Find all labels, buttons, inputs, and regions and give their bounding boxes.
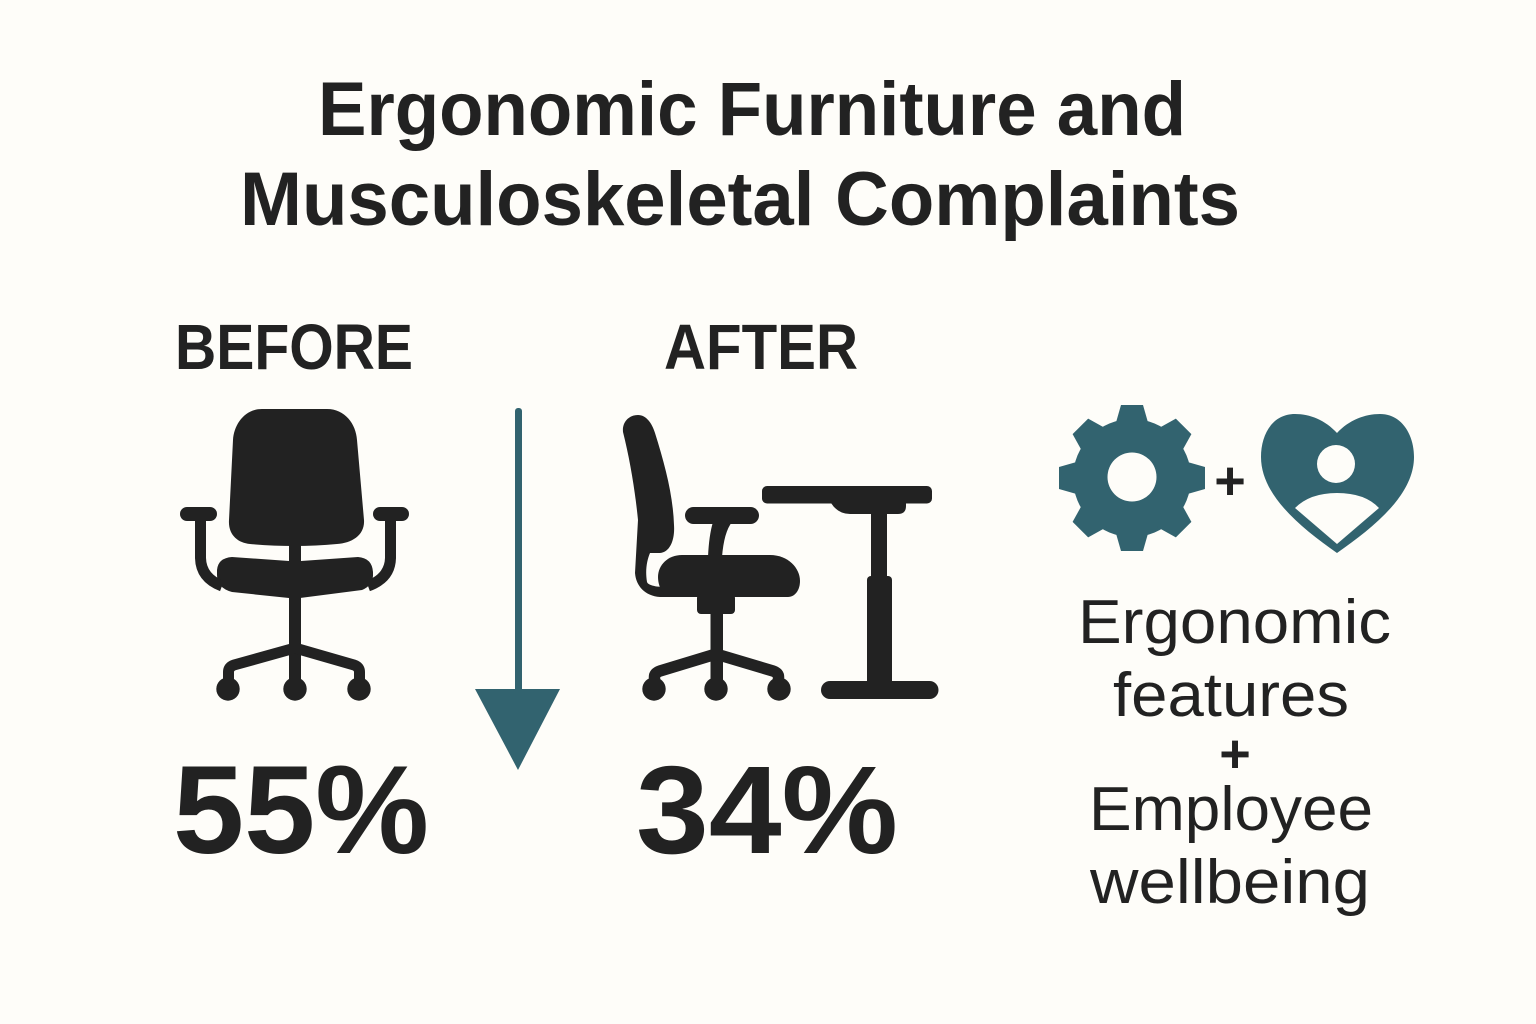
- heading: after: AFTER: [664, 311, 858, 383]
- icon: ergonomic chair and desk (after): [623, 415, 938, 701]
- icon: heart with person: [1261, 414, 1414, 553]
- text: ergonomic features + employee wellbeing: Ergonomic: [1078, 588, 1391, 657]
- stat: 55%: 55%: [173, 741, 429, 880]
- icon: chair base: [642, 594, 791, 701]
- stat: 34%: 34%: [636, 741, 898, 880]
- heading: before: BEFORE: [175, 311, 413, 383]
- title: Ergonomic Furniture and: [318, 67, 1186, 152]
- text: ergonomic features + employee wellbeing: +: [1219, 724, 1251, 784]
- text: ergonomic features + employee wellbeing: features: [1113, 661, 1349, 730]
- plus sign: +: [1214, 451, 1246, 511]
- icon: office chair (before): [180, 409, 409, 701]
- icon: gear: [1059, 405, 1205, 551]
- text: ergonomic features + employee wellbeing: Employee: [1089, 775, 1373, 844]
- icon: desk: [762, 486, 938, 699]
- icon: chair backrest: [623, 415, 680, 597]
- title: Musculoskeletal Complaints: [240, 157, 1240, 242]
- icon: chair seat: [658, 555, 800, 597]
- text: ergonomic features + employee wellbeing: wellbeing: [1089, 848, 1370, 917]
- icon: chair armrest: [685, 507, 759, 557]
- text: ergonomic features + employee wellbeing: [1078, 588, 1391, 917]
- arrow: decrease: [475, 408, 560, 770]
- title: [240, 67, 1240, 242]
